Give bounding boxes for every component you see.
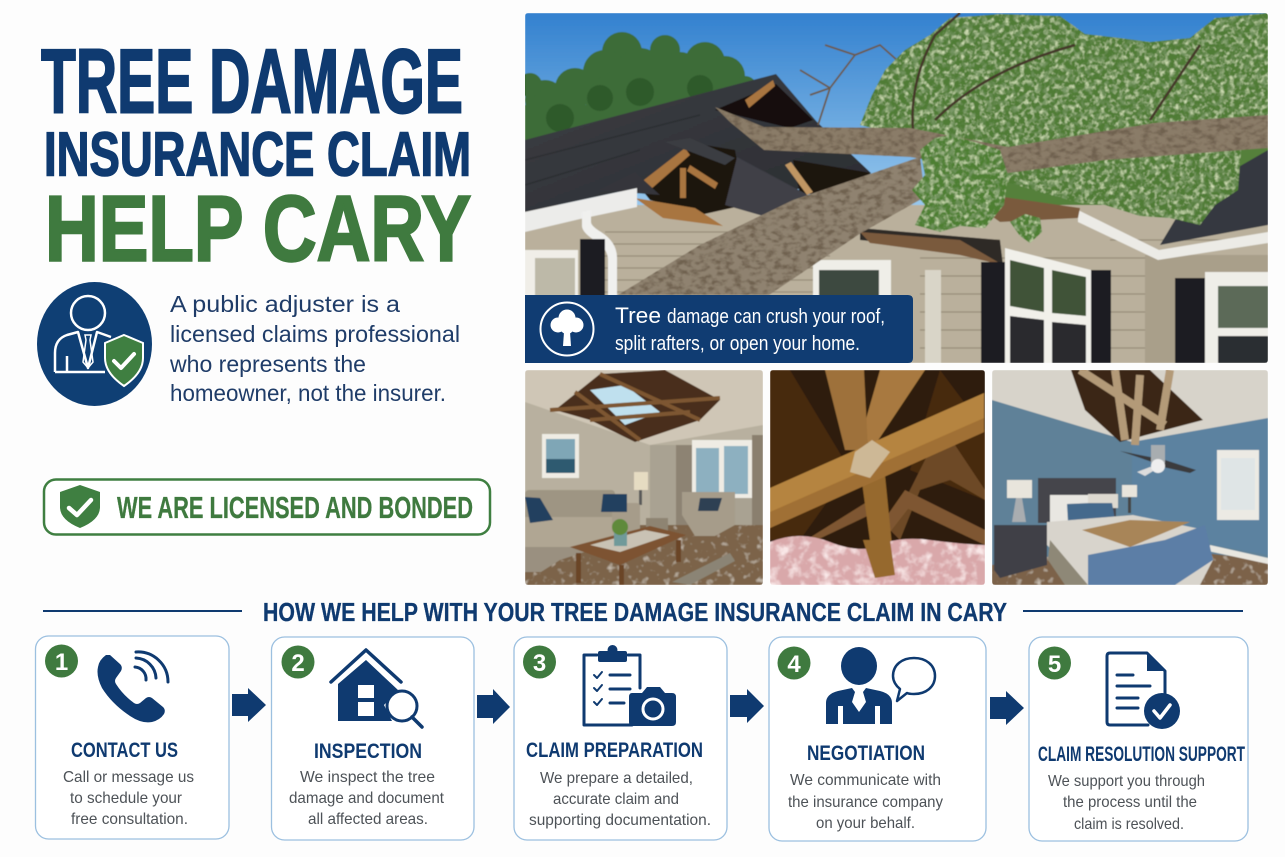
text block: public adjuster definition: A public adjuster is a <box>170 291 400 317</box>
photo: tree fallen on house roof <box>518 13 1268 363</box>
step 3: claim preparation: We prepare a detailed, <box>540 770 693 787</box>
step 5: claim resolution support: claim is resolved. <box>1074 816 1184 833</box>
photo: cracked attic rafters <box>770 370 985 585</box>
pillows <box>1050 495 1092 523</box>
armchair <box>682 492 735 536</box>
arrow 3 <box>730 689 764 723</box>
foliage below branch <box>1238 150 1242 186</box>
icon: phone <box>98 652 168 722</box>
green backing behind lower foliage <box>1004 147 1268 206</box>
step 3: claim preparation <box>514 637 727 840</box>
step 2: inspection: damage and document <box>289 790 445 807</box>
arrow 1 <box>232 688 266 722</box>
icon: person with speech bubble <box>826 647 935 724</box>
step 4: negotiation: the insurance company <box>788 794 943 811</box>
step 2: inspection: 2 <box>291 650 305 677</box>
badge: licensed and bonded: WE ARE LICENSED AND BONDED <box>117 490 473 525</box>
coffee table <box>570 526 686 565</box>
title: HELP CARY <box>45 176 471 280</box>
foliage front <box>912 135 1008 232</box>
siding <box>525 205 1268 363</box>
step 1: contact us: to schedule your <box>70 790 183 807</box>
step 4: negotiation: on your behalf. <box>816 815 915 832</box>
nightstand and lamps <box>994 525 1047 578</box>
bare branches <box>799 44 897 126</box>
text block: public adjuster definition <box>169 291 460 406</box>
ceiling fan <box>1120 451 1196 473</box>
step 4: negotiation: NEGOTIATION <box>807 742 925 765</box>
step 5: claim resolution support: We support you through <box>1048 773 1205 790</box>
step 3: claim preparation: CLAIM PREPARATION <box>526 739 703 762</box>
step 2: inspection <box>272 637 474 840</box>
step 5: claim resolution support: 5 <box>1048 651 1061 678</box>
text block: public adjuster definition: licensed claims professional <box>170 321 460 347</box>
step 4: negotiation: We communicate with <box>790 772 941 789</box>
step 3: claim preparation: accurate claim and <box>553 791 679 808</box>
icon: tree in circle <box>540 302 594 356</box>
right roof <box>1160 150 1268 245</box>
foliage back <box>860 13 1268 225</box>
icon: clipboard and camera <box>584 645 676 726</box>
fallen shingle piece <box>725 157 808 218</box>
window <box>1217 450 1259 520</box>
step 1: contact us: 1 <box>55 649 68 676</box>
arrow 2 <box>477 689 510 724</box>
icon: document with check <box>1107 653 1180 729</box>
step 3: claim preparation: 3 <box>533 650 546 677</box>
step 4: negotiation <box>769 637 986 841</box>
background trees <box>525 32 754 141</box>
text block: public adjuster definition: who represents the <box>169 351 366 377</box>
photo: damaged living room <box>525 370 763 585</box>
badge: licensed and bonded <box>44 480 490 534</box>
caption banner: Tree <box>615 303 661 328</box>
text block: public adjuster definition: homeowner, not the insurer. <box>170 380 446 406</box>
step 1: contact us <box>36 636 229 839</box>
step 1: contact us: free consultation. <box>71 811 188 828</box>
sofa <box>525 490 615 518</box>
title: TREE DAMAGE <box>41 32 463 132</box>
caption banner: split rafters, or open your home. <box>615 333 860 355</box>
step 5: claim resolution support: the process until the <box>1063 794 1197 811</box>
floor <box>992 554 1268 585</box>
bed <box>1047 515 1213 585</box>
step 2: inspection: INSPECTION <box>314 740 422 763</box>
icon: public adjuster with shield <box>37 282 152 406</box>
sky <box>525 13 1268 213</box>
step 5: claim resolution support <box>1029 637 1248 841</box>
broken fascia and dark roof section <box>860 228 1003 265</box>
windows and shutters <box>525 250 578 296</box>
title <box>41 32 471 280</box>
fallen trunk <box>618 157 925 295</box>
step 2: inspection: We inspect the tree <box>300 769 435 786</box>
caption banner <box>525 295 913 363</box>
title: INSURANCE CLAIM <box>44 120 471 190</box>
step 2: inspection: all affected areas. <box>308 811 428 828</box>
horizontal branch <box>715 107 1268 173</box>
step 1: contact us: Call or message us <box>63 769 194 786</box>
step 4: negotiation: 4 <box>787 651 801 678</box>
arrow 4 <box>990 691 1024 725</box>
caption banner: damage can crush your roof, <box>667 306 885 328</box>
photo: damaged bedroom <box>992 370 1268 585</box>
icon: house with magnifier <box>331 650 422 727</box>
step 1: contact us: CONTACT US <box>71 739 178 762</box>
roof hole <box>715 84 813 128</box>
left roof <box>525 74 871 212</box>
headboard <box>1038 478 1116 523</box>
section heading: HOW WE HELP WITH YOUR TREE DAMAGE INSURANCE CLAIM IN CARY <box>263 597 1007 627</box>
gutter <box>525 188 637 232</box>
dark stems <box>910 13 1202 130</box>
step 3: claim preparation: supporting documentation. <box>529 812 711 829</box>
